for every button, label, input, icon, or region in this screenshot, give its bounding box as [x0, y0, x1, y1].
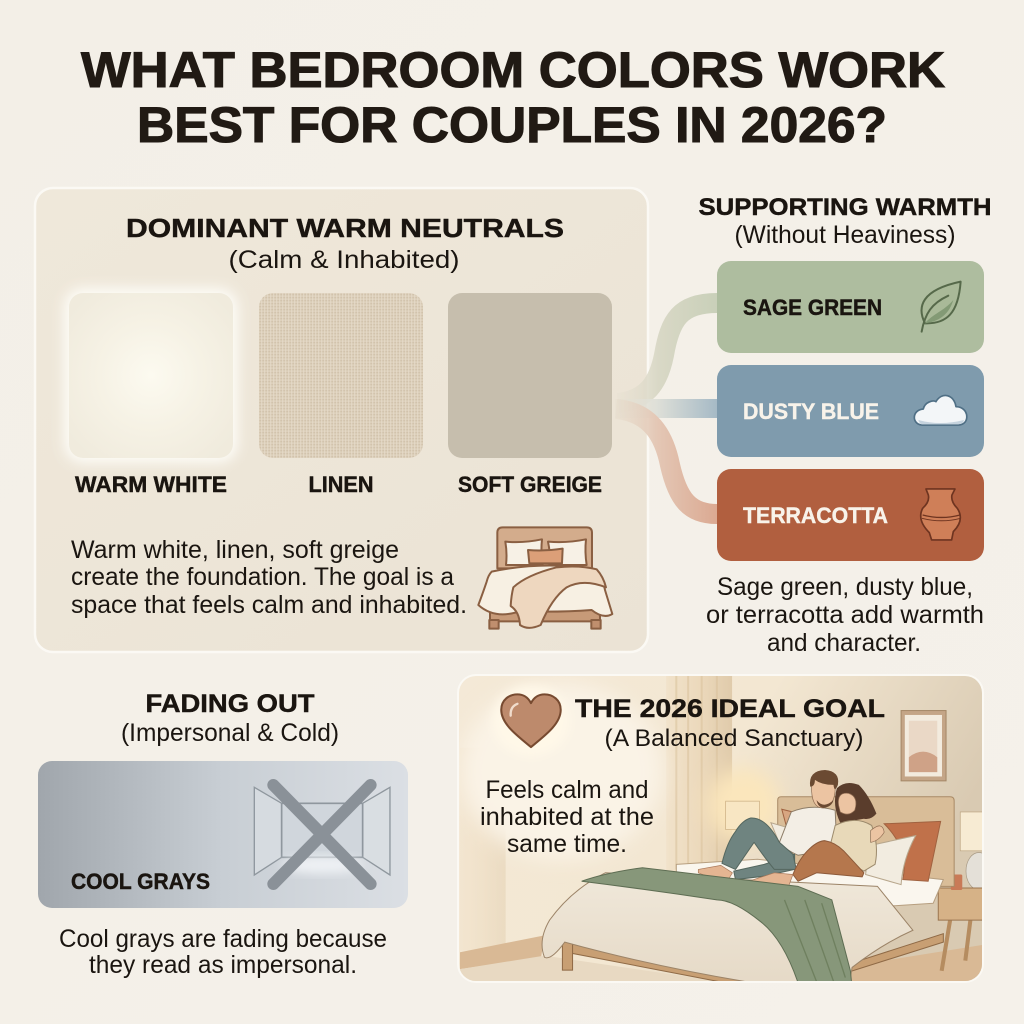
card: sage green	[717, 261, 984, 353]
card: terracotta	[717, 469, 984, 561]
text: goal description: Feels calm and	[486, 776, 648, 804]
swatch: soft greige	[448, 293, 612, 458]
text: accent colors description: or terracotta add warmth	[706, 601, 984, 629]
title: WHAT BEDROOM COLORS WORK	[81, 42, 945, 98]
text: cool grays description	[59, 925, 387, 979]
icon: cloud	[914, 395, 967, 425]
icon: leaf	[922, 282, 961, 332]
label: warm white: WARM WHITE	[75, 472, 227, 497]
title: BEST FOR COUPLES IN 2026?	[137, 97, 887, 153]
pillows	[771, 809, 941, 885]
title	[81, 42, 945, 153]
text: accent colors description	[706, 573, 984, 657]
bed frame	[562, 933, 944, 981]
body text: foundation	[71, 536, 467, 619]
text: goal description: same time.	[507, 830, 627, 858]
panel: the 2026 ideal goal	[457, 673, 992, 991]
label: soft greige: SOFT GREIGE	[458, 472, 602, 497]
nightstand	[938, 874, 986, 971]
illustration: couple on bed	[459, 673, 992, 991]
body text: foundation: create the foundation. The goal is a	[71, 563, 454, 591]
card: cool grays	[38, 761, 408, 908]
text: accent colors description: and character.	[767, 629, 921, 657]
swatch: warm white	[65, 289, 237, 462]
panel: dominant warm neutrals	[35, 188, 648, 652]
connectors: swatches to accent colors	[615, 303, 717, 514]
heading: dominant warm neutrals: DOMINANT WARM NEUTRALS	[126, 213, 564, 243]
card: dusty blue	[717, 365, 984, 457]
text: cool grays description: they read as impersonal.	[89, 951, 357, 979]
duvet	[542, 873, 913, 988]
woman	[746, 783, 884, 886]
man	[698, 770, 838, 880]
body text: foundation: space that feels calm and inhabited.	[71, 591, 467, 619]
mattress	[676, 859, 943, 907]
green throw	[582, 868, 852, 988]
label: linen: LINEN	[308, 472, 374, 497]
label: dusty blue: DUSTY BLUE	[743, 399, 879, 424]
heading: fading out: FADING OUT	[146, 690, 314, 718]
label: cool grays: COOL GRAYS	[71, 869, 210, 894]
text: goal description	[480, 776, 654, 858]
text: goal description: inhabited at the	[480, 803, 654, 831]
label: terracotta: TERRACOTTA	[743, 503, 888, 528]
heading: supporting warmth: SUPPORTING WARMTH	[698, 194, 992, 221]
subheading: without heaviness: (Without Heaviness)	[734, 221, 956, 249]
picture frame	[901, 711, 946, 781]
icon: vase	[921, 489, 961, 540]
icon: crossed out room	[254, 785, 390, 884]
icon: heart	[492, 685, 570, 756]
headboard	[778, 797, 954, 886]
text: accent colors description: Sage green, dusty blue,	[717, 573, 973, 601]
text: cool grays description: Cool grays are fading because	[59, 925, 387, 953]
swatch: linen	[259, 293, 423, 458]
icon: bed	[478, 527, 612, 629]
lamp right	[960, 812, 982, 888]
subheading: a balanced sanctuary: (A Balanced Sanctuary)	[604, 725, 864, 752]
label: sage green: SAGE GREEN	[743, 295, 882, 320]
heading: the 2026 ideal goal: THE 2026 IDEAL GOAL	[575, 695, 885, 723]
subheading: calm and inhabited: (Calm & Inhabited)	[228, 246, 460, 274]
body text: foundation: Warm white, linen, soft greige	[71, 536, 399, 564]
subheading: impersonal and cold: (Impersonal & Cold)	[121, 719, 339, 747]
lamp left	[726, 801, 759, 830]
